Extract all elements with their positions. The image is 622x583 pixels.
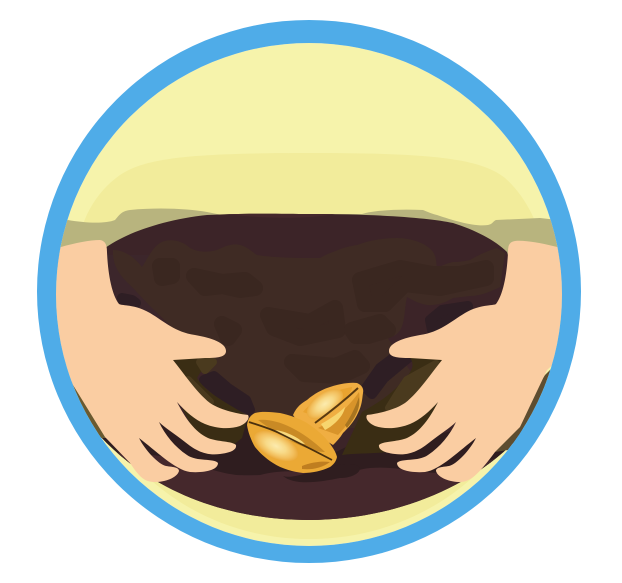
olive soil under hands bbox=[172, 358, 248, 446]
upper soil clumps bbox=[113, 238, 505, 428]
lower dark soil bbox=[102, 415, 523, 475]
dark purple clumps near hands bbox=[122, 298, 468, 410]
right hand bbox=[366, 241, 580, 482]
seed: back bbox=[293, 383, 363, 445]
soil mound bbox=[100, 214, 523, 520]
olive soil highlights bbox=[188, 362, 436, 408]
horizon ground band bbox=[50, 209, 575, 270]
purple side soil bbox=[100, 255, 190, 360]
bottom soil layer bbox=[117, 452, 497, 520]
reddish top rim of soil bbox=[226, 214, 334, 218]
circular badge background bbox=[56, 43, 562, 546]
darker soil lumps bbox=[160, 266, 486, 376]
right soil sliver by ring bbox=[495, 370, 550, 452]
left soil sliver by ring bbox=[72, 382, 106, 438]
seed: front bbox=[247, 412, 337, 473]
left hand bbox=[40, 240, 249, 482]
inner lighter glow panel bbox=[72, 153, 550, 539]
